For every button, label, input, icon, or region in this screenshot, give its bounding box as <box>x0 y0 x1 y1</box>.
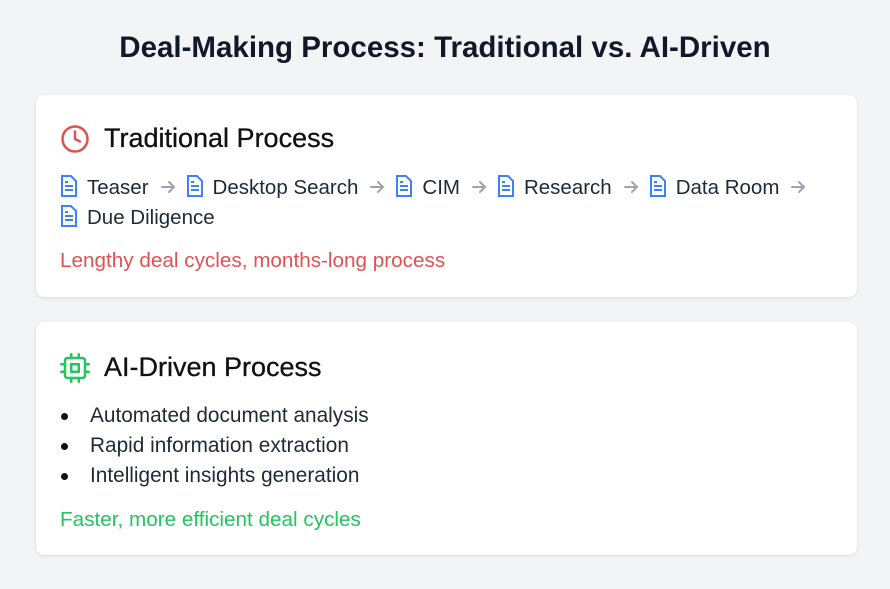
panel: ai-driven <box>36 322 857 555</box>
bullet list <box>61 404 369 487</box>
heading: traditional: Traditional Process <box>104 123 334 153</box>
heading: ai: AI-Driven Process <box>104 352 322 382</box>
panel: traditional <box>36 95 857 297</box>
bullet list: Automated document analysis <box>90 404 369 427</box>
process flow: Teaser Desktop Search CIM Research Data Room <box>87 176 779 199</box>
title: Deal-Making Process: Traditional vs. AI-Driven <box>119 31 771 64</box>
process flow: Due Diligence <box>87 206 215 229</box>
bullet list: Intelligent insights generation <box>90 464 359 487</box>
process flow <box>61 175 806 229</box>
bullet list: Rapid information extraction <box>90 434 349 457</box>
note: faster: Faster, more efficient deal cycles <box>60 508 361 531</box>
note: lengthy: Lengthy deal cycles, months-long process <box>60 249 445 272</box>
